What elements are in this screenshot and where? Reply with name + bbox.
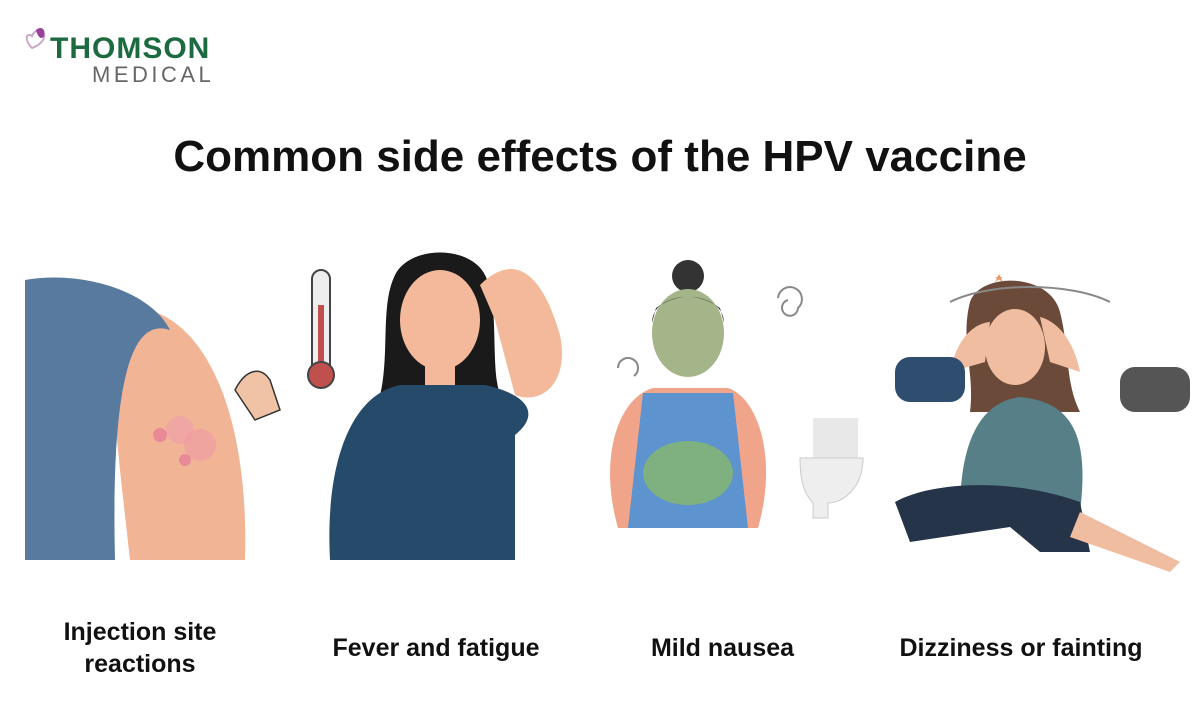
label: fever: Fever and fatigue	[332, 634, 540, 662]
label: nausea: Mild nausea	[651, 634, 794, 662]
thermometer	[312, 270, 330, 375]
panel: dizziness	[895, 274, 1190, 572]
label: injection	[64, 618, 216, 678]
panel: nausea	[610, 260, 864, 528]
panel: injection site	[25, 278, 281, 560]
panel: fever	[307, 252, 562, 560]
label: injection: Injection site	[64, 618, 216, 646]
label: dizziness: Dizziness or fainting	[899, 634, 1143, 662]
logo	[26, 28, 214, 87]
title: Common side effects of the HPV vaccine	[173, 132, 1027, 181]
logo text: THOMSON	[50, 32, 210, 65]
label: injection: reactions	[84, 650, 196, 678]
logo: MEDICAL	[92, 62, 214, 87]
arm	[25, 277, 280, 560]
icon: logo heart	[26, 28, 46, 50]
